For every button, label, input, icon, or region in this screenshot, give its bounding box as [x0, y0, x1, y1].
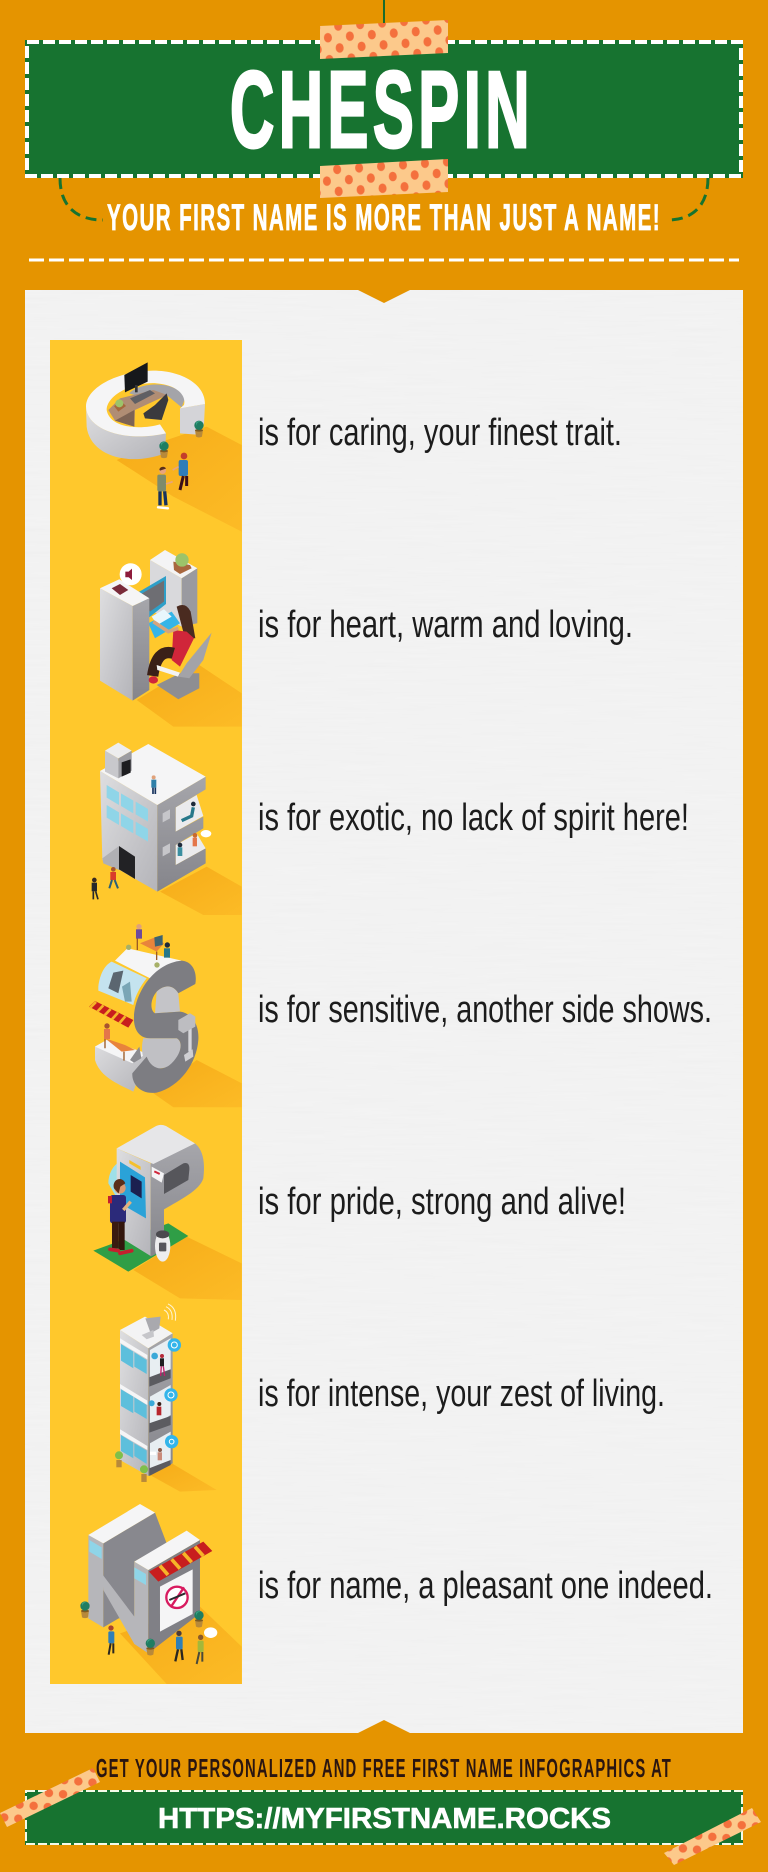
text: C: is for caring, your finest trait.	[258, 412, 622, 454]
person: dark	[92, 878, 98, 899]
icon: letter C reception desk	[86, 362, 242, 532]
person: red	[109, 867, 118, 888]
title banner	[25, 40, 743, 178]
person: man at cash machine	[108, 1179, 132, 1253]
person: man	[157, 467, 173, 508]
title: CHESPIN	[230, 49, 534, 171]
desk and people: bottom	[104, 1023, 141, 1063]
text: P: is for pride, strong and alive!	[258, 1181, 626, 1223]
footer url: HTTPS://MYFIRSTNAME.ROCKS	[158, 1803, 611, 1835]
people: rooms	[178, 802, 197, 856]
divider	[29, 258, 739, 262]
desk and people: top	[126, 924, 170, 968]
connector curves	[60, 178, 708, 220]
icon: letter P cash machine	[93, 1125, 242, 1300]
icon: letter I office tower	[115, 1304, 217, 1492]
text: H: is for heart, warm and loving.	[258, 604, 633, 646]
people in rooms	[149, 1353, 165, 1460]
person: woman	[173, 453, 188, 490]
icon: letter S office	[89, 924, 242, 1107]
tape: top	[320, 20, 448, 59]
yellow column	[50, 340, 242, 1684]
tape: bottom	[320, 159, 448, 198]
footer banner	[25, 1790, 743, 1845]
tape: footer right	[664, 1808, 761, 1865]
people	[108, 1625, 204, 1664]
plants	[115, 1451, 148, 1482]
tape: footer left	[0, 1768, 100, 1827]
hanging thread	[383, 0, 385, 28]
icon: letter H office desk	[100, 550, 242, 727]
icon: letter N shop	[80, 1504, 242, 1684]
panel: letters	[25, 289, 743, 1734]
icon: letter E office building	[92, 743, 242, 915]
person: roof	[151, 775, 156, 794]
